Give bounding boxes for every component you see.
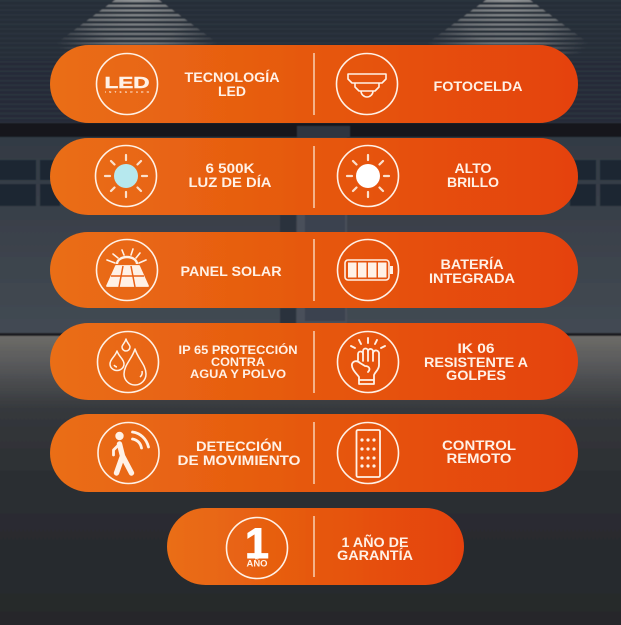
- icon: one year badge: [226, 518, 288, 578]
- divider: row 3: [313, 239, 315, 301]
- label: Detección de movimiento: DE MOVIMIENTO: [178, 453, 300, 468]
- panel: warranty: [167, 508, 464, 585]
- icon: LED: INTEGRADO: [105, 90, 150, 94]
- label: Detección de movimiento: DETECCIÓN: [196, 439, 282, 454]
- panel: row 4: [50, 323, 578, 400]
- panel: row 5: [50, 414, 578, 492]
- label: IP 65 protección contra agua y polvo: CONTRA: [211, 356, 266, 369]
- label: Detección de movimiento: [178, 439, 300, 468]
- icon: solar panel: [96, 240, 158, 300]
- label: Batería integrada: [429, 257, 515, 286]
- label: Panel solar: PANEL SOLAR: [180, 264, 282, 279]
- panel: row 1: [50, 45, 578, 123]
- label: IK 06 resistente a golpes: IK 06: [458, 341, 494, 356]
- pill: row 5: [50, 414, 578, 492]
- divider: row 2: [313, 146, 315, 208]
- label: IK 06 resistente a golpes: RESISTENTE A: [424, 355, 528, 370]
- icon: water drops: [98, 332, 158, 392]
- label: Fotocelda: FOTOCELDA: [434, 79, 523, 94]
- label: IP 65 protección contra agua y polvo: AGUA Y POLVO: [190, 368, 286, 381]
- icon: LED: LED: [104, 75, 150, 92]
- icon: bright sun: [338, 146, 398, 206]
- divider: warranty: [313, 516, 315, 577]
- label: IP 65 protección contra agua y polvo: [178, 344, 298, 381]
- label: IP 65 protección contra agua y polvo: IP 65 PROTECCIÓN: [178, 344, 298, 357]
- label: 1 año de garantía: [337, 535, 413, 563]
- divider: row 5: [313, 422, 315, 484]
- icon: one year badge: 1: [245, 520, 269, 568]
- label: Alto brillo: BRILLO: [447, 175, 499, 190]
- panel: row 3: [50, 232, 578, 308]
- icon: motion detection: [98, 422, 159, 484]
- label: 1 año de garantía: GARANTÍA: [337, 548, 413, 563]
- panel: row 2: [50, 138, 578, 215]
- label: Tecnología LED: LED: [218, 84, 246, 99]
- label: Tecnología LED: TECNOLOGÍA: [184, 70, 280, 85]
- label: Alto brillo: [447, 161, 499, 190]
- divider: row 1: [313, 53, 315, 115]
- label: Control remoto: REMOTO: [446, 451, 512, 466]
- label: Batería integrada: INTEGRADA: [429, 271, 515, 286]
- label: 6 500K luz de día: [188, 161, 272, 190]
- label: IK 06 resistente a golpes: [424, 341, 528, 383]
- icon: fist: [338, 332, 398, 392]
- icon: remote control: [338, 422, 398, 484]
- icon: one year badge: AÑO: [246, 558, 268, 570]
- label: Control remoto: [442, 438, 516, 466]
- label: Batería integrada: BATERÍA: [440, 257, 504, 272]
- icon: photocell: [336, 54, 398, 114]
- label: Alto brillo: ALTO: [454, 161, 492, 176]
- divider: row 4: [313, 331, 315, 393]
- label: Tecnología LED: [184, 70, 280, 99]
- icon: daylight sun: [96, 146, 156, 206]
- pill: row 4: [50, 323, 578, 400]
- label: 1 año de garantía: 1 AÑO DE: [342, 535, 409, 550]
- icon: battery: [338, 240, 398, 300]
- pill: warranty: [167, 508, 464, 585]
- pill: row 3: [50, 232, 578, 308]
- icon: LED: [96, 54, 158, 114]
- label: 6 500K luz de día: LUZ DE DÍA: [188, 175, 272, 190]
- pill: row 1: [50, 45, 578, 123]
- label: IK 06 resistente a golpes: GOLPES: [446, 368, 506, 383]
- pill: row 2: [50, 138, 578, 215]
- label: 6 500K luz de día: 6 500K: [206, 161, 255, 176]
- label: Control remoto: CONTROL: [442, 438, 516, 453]
